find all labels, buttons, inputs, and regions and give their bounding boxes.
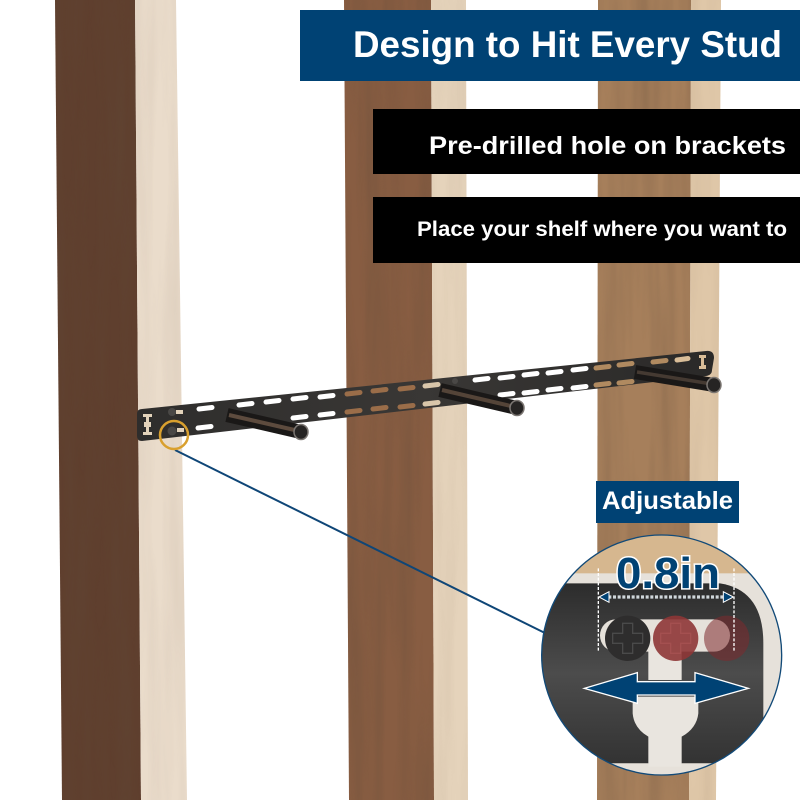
screw: red ghost right [704,616,749,661]
callout: shelf placement [373,197,800,263]
measurement label: 0.8in [616,549,720,598]
screws on bracket [168,378,458,436]
dimension arrowheads [599,592,733,602]
support rod: left [227,415,308,440]
leader line to magnifier [175,450,549,635]
light wood backdrop [566,573,781,774]
oak stud top [574,536,748,574]
wood stud: middle [344,0,468,800]
left keyhole cutout [143,414,152,435]
callout: pre-drilled hole: Pre-drilled hole on brackets [429,132,786,160]
title banner: Design to Hit Every Stud [353,24,782,65]
highlight ring around screw [160,421,188,449]
lower slots [198,382,632,428]
black mounting bracket [137,351,721,441]
callout: shelf placement: Place your shelf where you want to [417,218,787,241]
callout: pre-drilled hole [373,109,800,174]
magnified detail circle [540,533,788,780]
adjustable label: Adjustable [602,487,733,515]
adjustment arrow [584,673,748,703]
support rod: right [635,372,721,392]
keyhole cutout [633,647,698,767]
bottom plate edge [611,763,648,764]
horizontal slot cutout [600,619,730,652]
title banner [300,10,800,81]
dimension lines [598,568,734,652]
support rod: middle [440,390,524,416]
circle border [542,535,782,775]
dark plate [540,583,763,763]
wood stud: right [597,0,721,800]
wood stud: left [55,0,187,800]
bracket plate [137,351,714,441]
screw: red ghost middle [653,616,698,661]
adjustable label [596,481,739,523]
right keyhole cutout [699,355,706,369]
screw: black [605,616,650,661]
upper slots [199,358,688,409]
